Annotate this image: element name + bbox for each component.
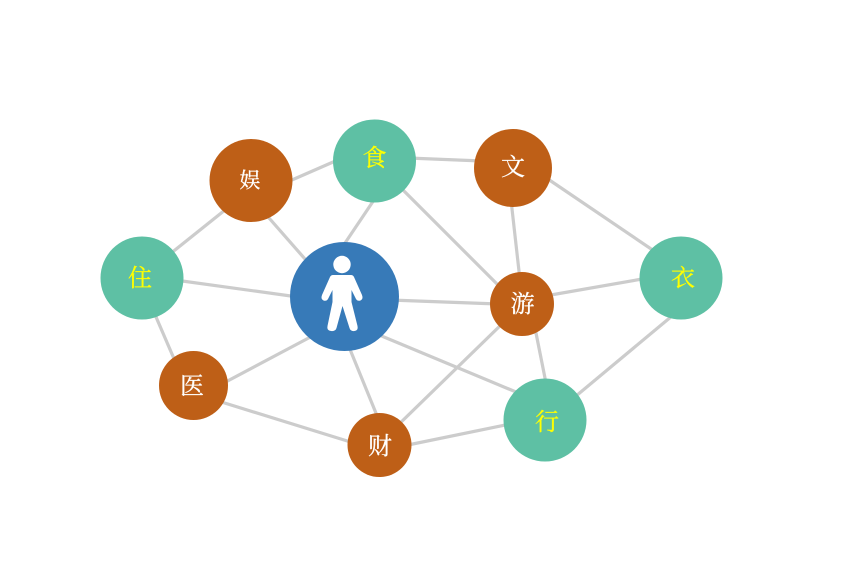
node: 娱: 娱 [240,168,260,192]
node: 食 [333,120,416,202]
icon: person [322,256,362,331]
node: 住: 住 [128,265,152,292]
node: 衣: 衣 [671,265,695,292]
node: 衣 [640,236,722,320]
connecting lines [150,158,678,446]
node: 财 [348,413,412,477]
node: person center [290,242,399,351]
node: 行: 行 [535,409,559,436]
node: 游: 游 [510,291,534,318]
node: 娱 [210,139,292,222]
node: 医: 医 [180,373,204,400]
node: 游 [490,272,554,336]
node: 文 [474,129,552,207]
node: 财: 财 [368,433,392,460]
node: 医 [159,351,228,420]
node: 文: 文 [501,154,525,181]
node: 食: 食 [362,145,386,172]
node: 行 [504,378,586,462]
node: 住 [100,236,184,320]
